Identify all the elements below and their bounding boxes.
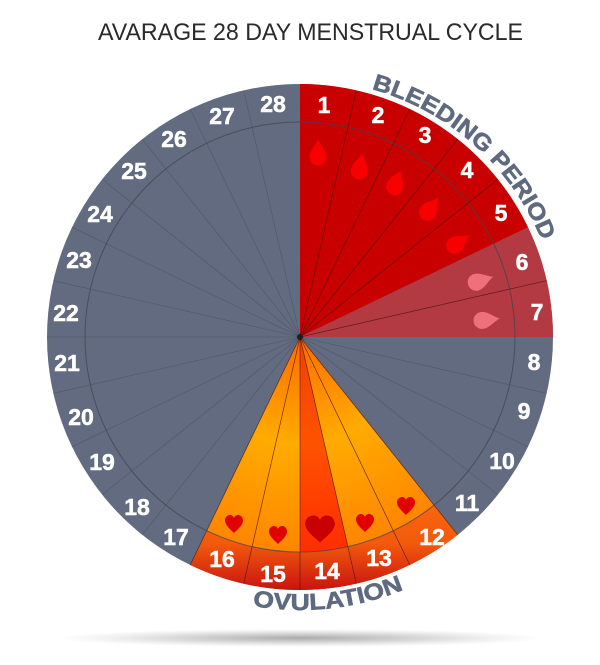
day numbers: 9: [518, 398, 530, 424]
title: AVARAGE 28 DAY MENSTRUAL CYCLE: [98, 19, 523, 46]
day numbers: 6: [516, 249, 528, 275]
day numbers: 4: [461, 157, 474, 183]
day numbers: 18: [124, 494, 150, 520]
ovulation label: OVULATION: [254, 575, 402, 610]
centre dot: [297, 334, 303, 340]
day numbers: 26: [161, 126, 187, 152]
ovulation peak wedge: day 14: [300, 337, 356, 590]
day numbers: 12: [419, 524, 445, 550]
coloured day dividers: [190, 90, 547, 590]
lighter bleeding wedge: days 6-7: [300, 227, 553, 337]
day numbers: 15: [260, 561, 286, 587]
blood drops: [310, 139, 501, 330]
day numbers: 2: [372, 102, 384, 128]
day numbers: 17: [163, 524, 189, 550]
hearts: [225, 497, 415, 544]
day numbers: 20: [68, 404, 94, 430]
ovulation wedge: days 12-13 and 15-16: [190, 337, 458, 590]
day numbers: 28: [260, 91, 286, 117]
inner circle: [85, 122, 515, 552]
day numbers: 10: [489, 448, 515, 474]
day numbers: 25: [121, 158, 147, 184]
day numbers: 14: [314, 558, 340, 584]
day numbers: 24: [87, 201, 113, 227]
grey day dividers: [47, 90, 547, 535]
cycle wheel: [47, 84, 553, 590]
day numbers: 16: [209, 546, 235, 572]
day numbers: 22: [53, 300, 79, 326]
ground shadow: [58, 629, 542, 647]
day numbers: 5: [495, 200, 508, 226]
day numbers: 27: [209, 103, 235, 129]
day numbers: 8: [528, 349, 541, 375]
day numbers: 3: [419, 122, 431, 148]
grey days disc: [47, 84, 553, 590]
ovulation outer ring: [190, 505, 458, 590]
day numbers: 19: [89, 449, 115, 475]
bleeding period wedge: days 1-5: [300, 84, 528, 337]
day numbers: 1: [318, 92, 331, 118]
day numbers: [53, 91, 543, 587]
day numbers: 11: [455, 490, 479, 516]
day numbers: 21: [54, 350, 80, 376]
day numbers: 13: [366, 545, 392, 571]
bleeding period label: BLEEDING PERIOD: [372, 74, 554, 238]
day numbers: 7: [531, 299, 543, 325]
day numbers: 23: [66, 247, 92, 273]
